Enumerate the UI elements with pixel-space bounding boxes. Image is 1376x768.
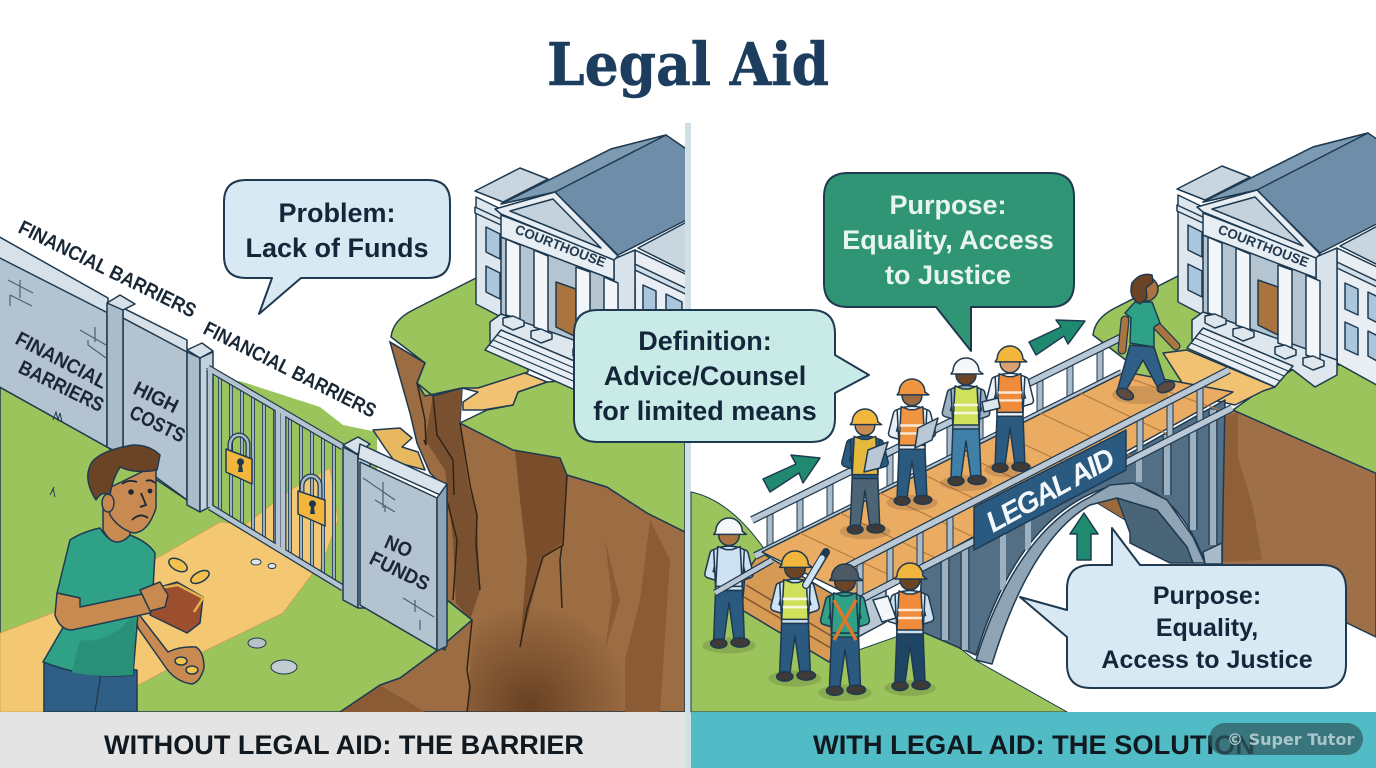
callout: purpose (blue): Purpose: (1153, 582, 1261, 610)
callout: problem (224, 180, 450, 314)
wall: no funds (358, 444, 447, 651)
sand path (0, 468, 338, 712)
arrow (1029, 320, 1085, 355)
callout: purpose (green): Equality, Access (842, 225, 1054, 255)
callout: purpose (blue): Access to Justice (1101, 646, 1313, 674)
harness straps (834, 600, 856, 640)
wall: financial barriers (0, 235, 111, 447)
bridge deck (762, 372, 1233, 600)
courthouse (1093, 133, 1376, 398)
wall text (369, 534, 430, 590)
watermark (1209, 723, 1363, 755)
sand path to courthouse (1163, 350, 1275, 405)
caption bar: with: WITH LEGAL AID: THE SOLUTION (813, 730, 1255, 760)
head (88, 445, 160, 533)
bridge understructure (918, 400, 1225, 664)
callout: definition (574, 310, 869, 442)
caption bar: without: WITHOUT LEGAL AID: THE BARRIER (104, 730, 584, 760)
courthouse label: COURTHOUSE (1216, 222, 1311, 270)
clipboard (864, 442, 888, 472)
workers on deck (840, 346, 1036, 539)
wall: high costs (107, 295, 188, 500)
callout: purpose (blue) (1020, 528, 1346, 688)
post (343, 437, 370, 608)
worker pointing (768, 551, 822, 687)
wrench (715, 560, 772, 593)
courthouse label: COURTHOUSE (513, 222, 608, 270)
wooden steps (742, 552, 886, 662)
plan sheet (873, 596, 896, 622)
padlock (226, 435, 252, 484)
courthouse (391, 135, 698, 400)
post (187, 343, 213, 512)
upper green edge (390, 342, 462, 396)
callout: definition: Advice/Counsel (604, 361, 806, 391)
hill behind gate (214, 376, 377, 584)
callout: problem: Lack of Funds (245, 233, 429, 263)
green ground (0, 387, 472, 712)
callout: purpose (green): Purpose: (889, 190, 1007, 220)
wall text (130, 381, 185, 442)
panel: without legal aid (0, 135, 698, 712)
worker (940, 358, 992, 491)
back rail (752, 337, 1122, 556)
callout: definition: for limited means (593, 396, 817, 426)
worker (886, 379, 938, 511)
locked gate (208, 368, 343, 588)
bridge (742, 274, 1233, 664)
legal aid banner: LEGAL AID (981, 442, 1121, 539)
center divider (685, 123, 691, 768)
padlock (298, 476, 325, 526)
wall text: NO (381, 531, 415, 563)
workers on ground (702, 518, 936, 701)
watermark: © Super Tutor (1227, 730, 1354, 749)
callout: purpose (green) (824, 173, 1074, 351)
panel: with legal aid (691, 133, 1376, 712)
callout: purpose (green): to Justice (885, 260, 1011, 290)
arrow (1070, 513, 1098, 560)
worker (840, 409, 890, 539)
callout: definition: Definition: (638, 326, 772, 356)
right cliff and ground (1220, 365, 1376, 637)
caption bar: with (691, 712, 1376, 768)
walking person (1112, 274, 1176, 404)
clipboard (915, 418, 938, 448)
stones (248, 559, 297, 674)
text along wall: FINANCIAL BARRIERS (200, 318, 380, 423)
text along wall (15, 217, 380, 423)
cliff and chasm (340, 342, 685, 712)
front rail (847, 370, 1232, 605)
wall text (15, 332, 104, 411)
rubble at cliff edge (373, 428, 425, 470)
raised arm (806, 552, 826, 585)
wall text: HIGH (130, 378, 182, 418)
broken path (462, 373, 548, 411)
title: Legal Aid (547, 30, 829, 99)
worker with plan (884, 563, 936, 696)
wallet (140, 582, 203, 633)
green hill (691, 492, 1067, 712)
wall text: COSTS (126, 402, 188, 447)
person with empty wallet (43, 445, 211, 712)
arrow (763, 455, 820, 492)
callout: purpose (blue): Equality, (1156, 614, 1258, 642)
coins (167, 555, 211, 674)
worker (984, 346, 1036, 478)
text along wall: FINANCIAL BARRIERS (15, 217, 199, 323)
green plateau (460, 380, 685, 532)
worker with wrench (702, 518, 756, 654)
wall text: BARRIERS (15, 357, 107, 417)
handshake document (982, 398, 1000, 412)
wall text: FINANCIAL (12, 328, 111, 394)
caption bar: without (0, 712, 685, 768)
grass tuft (50, 412, 62, 497)
worker in harness (818, 564, 872, 701)
callout: problem: Problem: (278, 198, 396, 228)
wall text: FUNDS (366, 548, 433, 596)
